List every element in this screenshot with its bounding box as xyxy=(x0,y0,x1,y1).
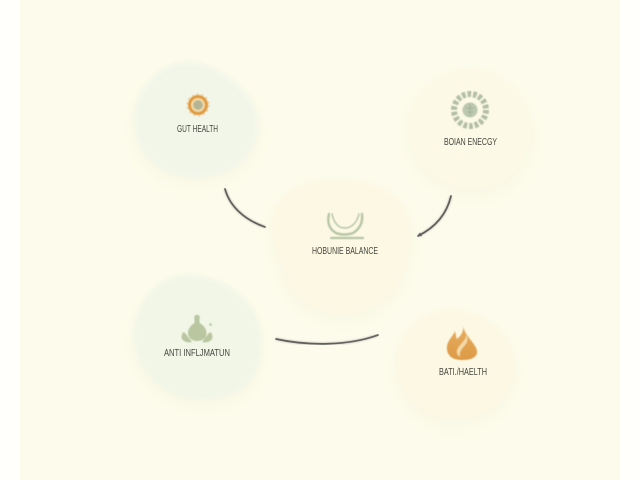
arrow: brain energy to hormone balance xyxy=(417,196,451,236)
label: hormone balance: HOBUNIE BALANCE xyxy=(312,245,378,257)
icon: brain energy circle xyxy=(454,94,486,126)
icon: hormone bowl xyxy=(328,214,363,238)
label: brain energy: BOIAN ENECGY xyxy=(444,136,497,148)
panel: hormone balance xyxy=(272,178,410,315)
label: gut flame: BATI./HAELTH xyxy=(439,366,487,378)
panel: anti inflammation xyxy=(134,275,261,399)
panel: brain energy xyxy=(408,68,530,189)
panel: gut health xyxy=(134,62,258,177)
icon: flame xyxy=(447,325,477,360)
icon: anti inflammation figure xyxy=(182,315,212,342)
label: anti inflammation: ANTI INFLJMATUN xyxy=(164,347,230,359)
icon: flame highlight xyxy=(457,334,468,357)
panel: gut flame xyxy=(396,309,514,419)
label: gut health: GUT HEALTH xyxy=(177,123,218,135)
icon: gut health ring xyxy=(187,94,209,116)
arrow: anti inflammation to gut flame xyxy=(276,335,378,344)
arrow: gut health to hormone balance xyxy=(225,189,265,227)
